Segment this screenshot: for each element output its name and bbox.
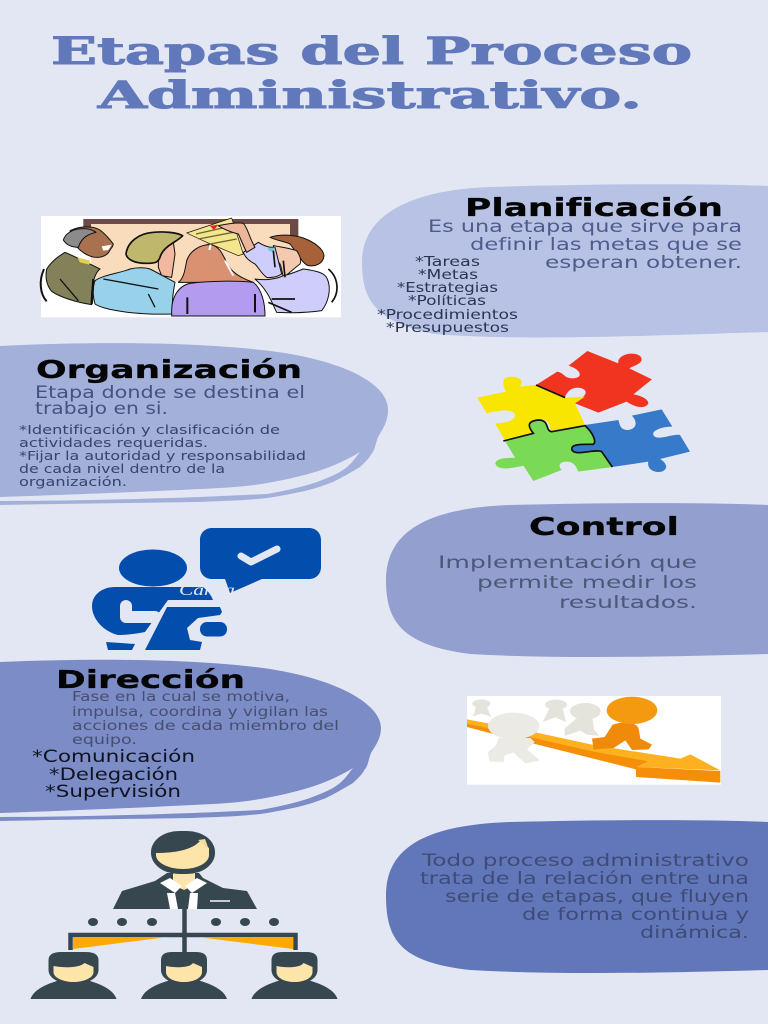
head xyxy=(119,550,187,586)
description: esperan obtener. xyxy=(545,253,742,272)
bullet list xyxy=(32,747,195,802)
icon: person with speech bubble xyxy=(92,528,321,650)
description: Implementación que xyxy=(438,553,697,572)
green piece xyxy=(495,420,612,481)
illustration: figures on an arrow xyxy=(467,696,721,785)
description: Etapa donde se destina el xyxy=(35,383,305,402)
yellow piece xyxy=(477,377,585,441)
bullet list: *Políticas xyxy=(408,293,486,309)
bullet list: *Identificación y clasificación de xyxy=(19,422,280,437)
bullet list: *Metas xyxy=(418,267,478,283)
description xyxy=(72,690,339,748)
closing text: trata de la relación entre una xyxy=(420,869,749,888)
panel shape xyxy=(386,820,768,973)
icon: puzzle xyxy=(477,351,690,481)
description: Es una etapa que sirve para xyxy=(428,217,742,236)
bullet list: *Fijar la autoridad y responsabilidad xyxy=(19,448,306,463)
panel shape xyxy=(0,660,381,821)
panel shape xyxy=(362,184,768,338)
bullet list: actividades requeridas. xyxy=(19,435,208,450)
bullet list: *Comunicación xyxy=(32,747,195,767)
bullet list: *Estrategias xyxy=(397,280,498,296)
icon: organization chart xyxy=(30,831,338,999)
closing text: serie de etapas, que fluyen xyxy=(445,887,749,906)
watermark: Canva xyxy=(179,582,235,599)
torso xyxy=(92,587,213,635)
orange accents xyxy=(73,937,293,949)
closing text: Todo proceso administrativo xyxy=(421,851,749,870)
bullet list: *Procedimientos xyxy=(377,307,518,323)
illustration: team at a board xyxy=(41,216,341,317)
heading: Planificación xyxy=(465,193,723,222)
heading: Control xyxy=(529,512,679,541)
red piece xyxy=(536,351,652,413)
employee center xyxy=(141,952,227,999)
panel: conclusión xyxy=(386,820,768,973)
title: Administrativo. xyxy=(96,73,642,117)
employee left xyxy=(30,952,116,999)
description: equipo. xyxy=(72,733,137,748)
small white figures xyxy=(472,699,601,736)
title xyxy=(51,29,692,117)
title: Etapas del Proceso xyxy=(51,29,692,73)
bullet list: organización. xyxy=(19,474,127,489)
arrow xyxy=(467,724,720,783)
closing text: de forma continua y xyxy=(522,905,749,924)
description xyxy=(428,217,742,272)
description xyxy=(438,553,697,612)
panel shape xyxy=(386,503,768,657)
panel: Control xyxy=(386,503,768,657)
bullet list xyxy=(19,422,306,489)
description: trabajo en si. xyxy=(35,399,168,418)
orange figure xyxy=(592,697,657,750)
bullet list xyxy=(377,254,518,336)
heading: Dirección xyxy=(56,665,245,694)
description: acciones de cada miembro del xyxy=(72,719,339,734)
description: permite medir los xyxy=(477,573,697,592)
employee right xyxy=(252,952,338,999)
bullet list: *Tareas xyxy=(415,254,480,270)
panel shape xyxy=(0,343,388,505)
description: definir las metas que se xyxy=(470,235,742,254)
heading: Organización xyxy=(36,355,302,384)
description: Fase en la cual se motiva, xyxy=(72,690,290,705)
speech bubble xyxy=(200,528,321,593)
blue piece xyxy=(572,409,690,472)
description: impulsa, coordina y vigilan las xyxy=(72,705,328,720)
connector lines xyxy=(70,909,296,953)
large white figure xyxy=(488,713,540,763)
manager xyxy=(113,831,257,909)
panel: Organización xyxy=(0,343,388,505)
closing text xyxy=(420,851,749,942)
panel: Dirección xyxy=(0,660,381,821)
closing text: dinámica. xyxy=(640,923,749,942)
bullet list: de cada nivel dentro de la xyxy=(19,461,225,476)
bullet list: *Presupuestos xyxy=(386,320,509,336)
description: resultados. xyxy=(559,593,697,612)
bullet list: *Supervisión xyxy=(45,782,181,802)
connector dots xyxy=(88,918,279,926)
bullet list: *Delegación xyxy=(49,765,178,785)
panel: Planificación xyxy=(362,184,768,338)
description xyxy=(35,383,305,418)
